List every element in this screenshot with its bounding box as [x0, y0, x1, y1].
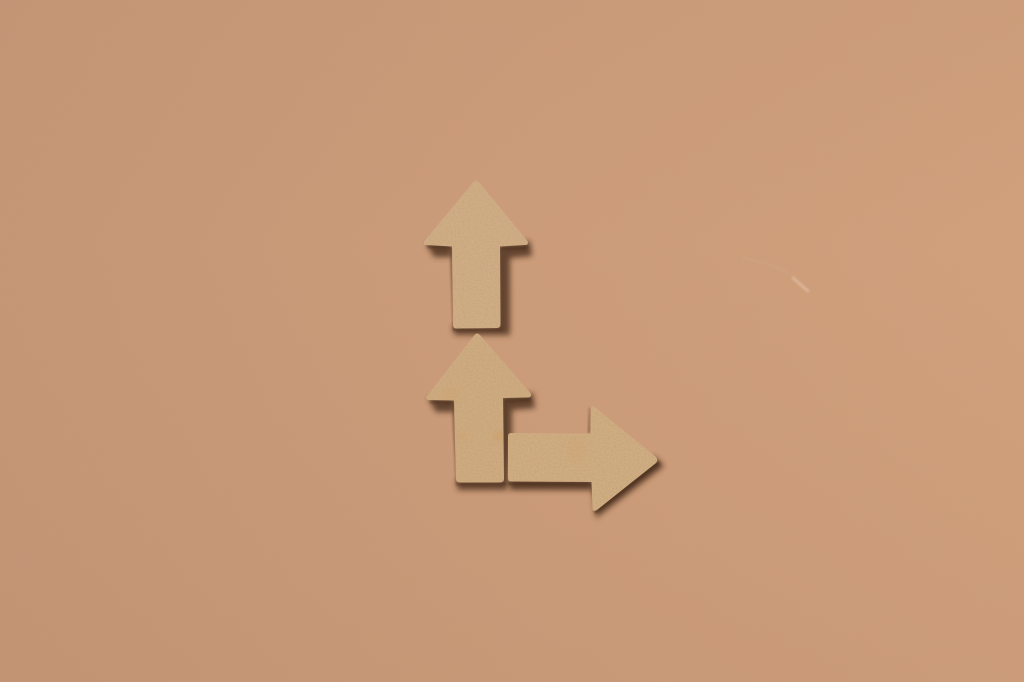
kraft paper background with three wooden arrows	[0, 0, 810, 682]
icon: top up arrow	[424, 180, 528, 328]
arrow shadows	[426, 241, 664, 518]
icon: right arrow	[508, 406, 657, 511]
paper scratch mark	[742, 258, 808, 291]
wood speckle texture and stains	[420, 176, 662, 516]
icon: middle up arrow	[426, 334, 531, 482]
